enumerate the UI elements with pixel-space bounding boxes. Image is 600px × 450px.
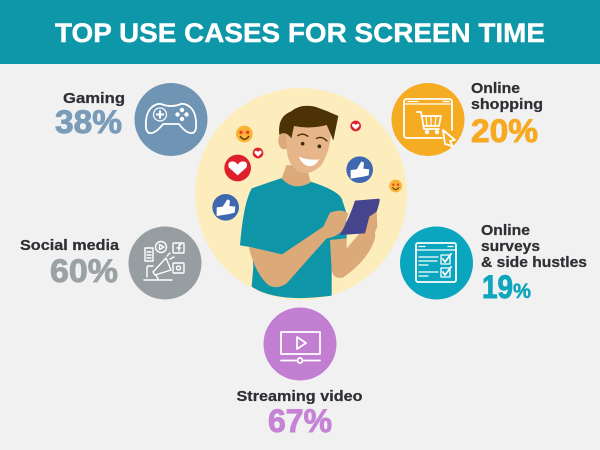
item: social media <box>20 226 202 300</box>
shopping label line two: shopping <box>471 96 543 113</box>
surveys value: 19 <box>482 269 513 305</box>
icon: heart badge small left <box>253 148 263 158</box>
icon: thumbs up badge left <box>212 194 239 221</box>
social media value: 60% <box>50 253 118 289</box>
surveys label: Online <box>481 222 530 239</box>
surveys label line three: & side hustles <box>481 254 587 271</box>
streaming label: Streaming video <box>236 388 362 405</box>
icon: emoji top left <box>236 126 253 142</box>
man's head <box>278 106 338 173</box>
title banner <box>0 0 600 64</box>
item: gaming <box>55 83 208 156</box>
item: online shopping <box>392 80 543 156</box>
man's body <box>240 165 380 298</box>
icon: thumbs up badge right <box>346 156 373 183</box>
streaming value: 67% <box>268 403 332 439</box>
surveys icon circle <box>400 226 473 300</box>
shopping label: Online <box>471 80 520 97</box>
icon: emoji right <box>389 180 402 192</box>
surveys percent sign: % <box>513 280 531 303</box>
item: online surveys <box>400 222 587 305</box>
item: streaming video <box>236 308 362 439</box>
gaming value: 38% <box>55 104 122 140</box>
social media label: Social media <box>20 237 120 254</box>
social media icon circle <box>128 226 202 300</box>
title banner: TOP USE CASES FOR SCREEN TIME <box>55 18 545 48</box>
gaming icon circle <box>134 83 208 156</box>
shopping value: 20% <box>471 113 538 149</box>
icon: heart badge large <box>224 155 251 181</box>
surveys label line two: surveys <box>481 238 540 255</box>
gaming label: Gaming <box>63 90 125 107</box>
streaming icon circle <box>264 308 336 380</box>
central illustration: man with tablet <box>195 88 407 300</box>
shopping icon circle <box>392 83 464 156</box>
icon: heart badge small right <box>350 121 361 131</box>
